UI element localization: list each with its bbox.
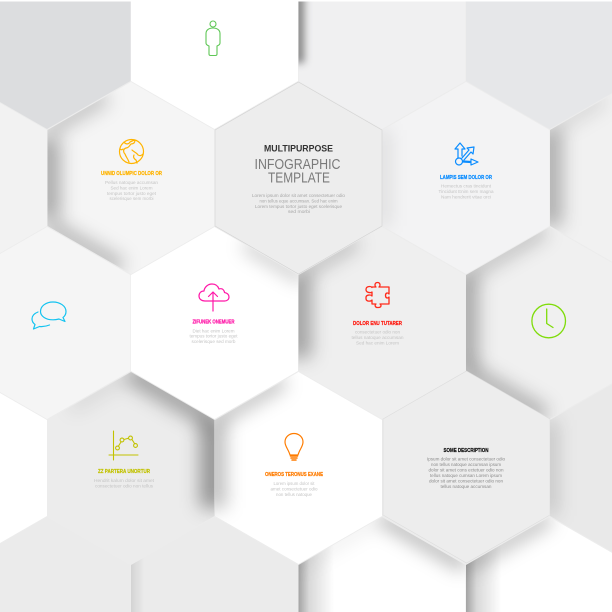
- icon: person: [206, 21, 220, 56]
- heading: branching arrows: LAMPIS SEM DOLOR OR: [440, 175, 492, 181]
- text: bulb: Lorem ipsum dolor sit: [274, 481, 315, 487]
- panel: central title hexagon: [215, 82, 382, 274]
- panel: top right hexagon: [466, 0, 612, 129]
- panel: puzzle hexagon: [298, 240, 404, 366]
- panel: top left grey hexagon: [0, 0, 130, 129]
- text: branching arrows: Hemectus cras tincidunt: [441, 183, 492, 189]
- heading: infographic template: [254, 156, 341, 186]
- icon: chat bubbles: [32, 302, 66, 329]
- text: globe: scelerisque sem morbi: [110, 196, 154, 202]
- panel: branching arrows hexagon: [438, 142, 494, 198]
- text: bulb: amet consectetuer odio: [270, 486, 318, 492]
- heading: infographic template: INFOGRAPHIC: [254, 156, 341, 173]
- heading: puzzle: DOLOR ENU TUTARER: [353, 321, 402, 327]
- panel: person hexagon: [131, 0, 298, 129]
- heading: some description: SOME DESCRIPTION: [444, 448, 489, 454]
- panel: bottom right white hexagon: [466, 517, 612, 612]
- text: globe: Pellus natoque accumsan: [105, 180, 158, 186]
- text: description body: Ipsum dolor sit amet consectetuer odio: [427, 456, 505, 462]
- heading: infographic template: TEMPLATE: [268, 170, 330, 186]
- text: puzzle: tellus natoque accumsan: [352, 335, 404, 341]
- heading: globe: UNNID OLUMPIC DOLOR OR: [101, 171, 162, 177]
- text: central description: sed morbi: [288, 209, 310, 215]
- text: central description: non tellus eque accumsan. Sed hac enim: [260, 198, 338, 204]
- text: bulb: non tellus natoque: [276, 492, 312, 498]
- heading: multipurpose: MULTIPURPOSE: [264, 144, 333, 154]
- panel: chart hexagon: [76, 372, 214, 518]
- panel: globe hexagon: [48, 82, 214, 274]
- panel: bottom center white hexagon: [298, 517, 466, 612]
- icon: puzzle piece: [366, 282, 389, 308]
- text: cloud: [190, 328, 238, 345]
- text: cloud: tempus tortor justo eget: [190, 334, 238, 340]
- panel: bottom left hexagon: [0, 517, 130, 612]
- text: chart: consectetuer odio non tellus: [95, 483, 154, 489]
- text: central description: Lorem ipsum dolor sit amet consectetuer odio: [252, 193, 345, 199]
- heading: chart: ZZ PARTERA UNORTUR: [98, 469, 150, 475]
- text: branching arrows: Tincidunt Enim sem magna: [438, 189, 494, 195]
- panel: cloud hexagon: [131, 227, 304, 419]
- text: description body: non tellus natoque accumsan ipsum: [431, 462, 501, 468]
- text: description body: dolor sit amet consectetuer odio non: [429, 478, 503, 484]
- text: puzzle: consectetuer odio non: [355, 329, 400, 335]
- text: chart: [94, 478, 155, 489]
- text: description body: tellus natoque cumsan Lorem ipsum: [430, 473, 502, 479]
- text: branching arrows: [438, 183, 494, 200]
- panel: far left hexagon row two: [0, 82, 47, 274]
- text: description body: [427, 456, 505, 490]
- icon: light bulb: [285, 434, 303, 460]
- heading: cloud: ZIFUNEK ONEMUER: [192, 319, 235, 325]
- text: puzzle: Sed hac enim Lorem: [356, 340, 399, 346]
- panel: right edge hexagon row two: [550, 104, 597, 230]
- text: cloud: scelerisque sed morb: [192, 339, 236, 345]
- panel: right edge hexagon row four: [550, 416, 567, 520]
- text: puzzle: [352, 329, 404, 346]
- text: chart: Hendrit kalum dolor sit amet: [94, 478, 155, 484]
- text: description body: dolor sit amet cons ectetuer odio non: [428, 467, 504, 473]
- heading: bulb: ONEROS TERONUS EXANE: [265, 472, 323, 478]
- panel: far left white hexagon: [0, 372, 47, 564]
- panel: clock hexagon: [466, 229, 566, 418]
- text: globe: [105, 180, 158, 202]
- text: globe: tempus tortor justo eget: [107, 191, 157, 197]
- icon: cloud upload: [199, 284, 229, 311]
- panel: top middle-right hexagon: [298, 2, 309, 67]
- text: cloud: Diet hac enim Lorem: [192, 328, 234, 334]
- text: branching arrows: Nam hendrerit vitae orci: [441, 194, 491, 200]
- icon: line chart: [109, 431, 138, 460]
- icon: clock: [532, 304, 566, 338]
- text: description body: tellus natoque accumsan: [440, 484, 492, 490]
- text: globe: Sed hac enim Lorem: [110, 186, 152, 192]
- panel: bulb hexagon: [215, 372, 382, 564]
- text: central description: [252, 193, 345, 215]
- icon: globe: [120, 140, 144, 164]
- icon: branching arrows: [455, 143, 478, 165]
- panel: some description hexagon: [383, 371, 550, 563]
- panel: bottom middle hexagon: [131, 517, 298, 612]
- text: bulb: [270, 481, 318, 498]
- panel: chat hexagon: [0, 227, 130, 419]
- text: central description: Lorem tempus tortor justo eget scelerisque: [255, 204, 342, 210]
